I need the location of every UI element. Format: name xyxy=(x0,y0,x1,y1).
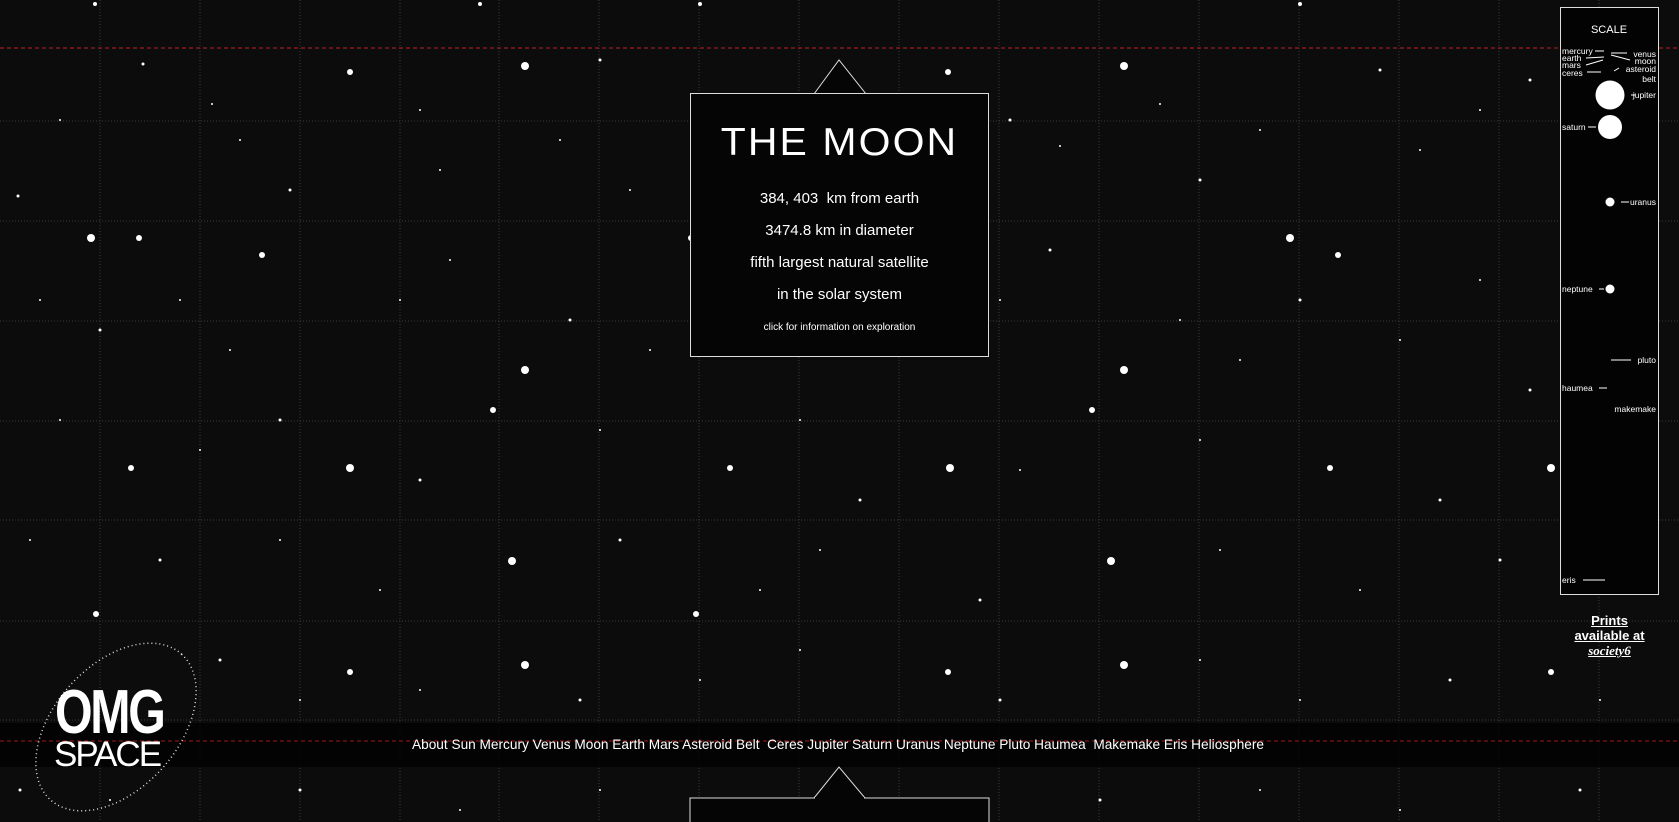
link text: click for information on exploration xyxy=(764,322,915,333)
pointer triangle: moon panel xyxy=(814,59,866,93)
panel: scale: ceres xyxy=(1562,68,1583,78)
panel: scale: uranus xyxy=(1630,197,1656,207)
panel: scale: saturn xyxy=(1562,122,1586,132)
text block: moon facts: 384, 403 km from earth xyxy=(760,190,919,207)
panel: scale: venus xyxy=(1633,49,1656,59)
callout: prints available at society6: Prints xyxy=(1591,613,1628,628)
planets xyxy=(1596,80,1624,110)
panel: scale xyxy=(1560,7,1659,595)
navigation bar: About Sun Mercury Venus Moon Earth Mars Asteroid Belt Ceres Jupiter Saturn Uranus Neptune Pluto Haumea Makemake Eris Heliosphere xyxy=(412,736,1264,752)
callout: prints available at society6: available at xyxy=(1574,628,1645,643)
title: THE MOON: THE MOON xyxy=(721,121,958,164)
panel: scale: haumea xyxy=(1562,383,1593,393)
panel: scale: jupiter xyxy=(1632,90,1656,100)
panel: scale: mars xyxy=(1562,60,1581,70)
panel: scale: earth xyxy=(1562,53,1582,63)
panel: scale: mercury xyxy=(1562,46,1593,56)
panel: scale: moon xyxy=(1635,56,1656,66)
panel: scale: makemake xyxy=(1614,404,1656,414)
panel: scale: eris xyxy=(1562,575,1576,585)
next panel preview at bottom xyxy=(690,766,990,822)
text block: moon facts: 3474.8 km in diameter xyxy=(765,222,914,239)
text block: moon facts: in the solar system xyxy=(777,286,902,303)
panel: scale: asteroid xyxy=(1626,64,1656,74)
callout: prints available at society6: society6 xyxy=(1588,643,1631,658)
logo: OMG SPACE: OMG xyxy=(55,678,164,747)
callout: prints available at society6 xyxy=(1574,613,1645,658)
logo: OMG SPACE xyxy=(35,642,197,812)
panel: scale: pluto xyxy=(1638,355,1656,365)
heading: SCALE: SCALE xyxy=(1591,24,1627,36)
panel: scale: neptune xyxy=(1562,284,1593,294)
text block: moon facts: fifth largest natural satellite xyxy=(750,254,929,271)
text block: moon facts xyxy=(750,190,929,303)
logo: OMG SPACE: SPACE xyxy=(54,735,160,774)
navigation bar xyxy=(0,723,1679,767)
panel: scale: belt xyxy=(1642,74,1657,84)
panel: the moon info xyxy=(690,93,989,357)
